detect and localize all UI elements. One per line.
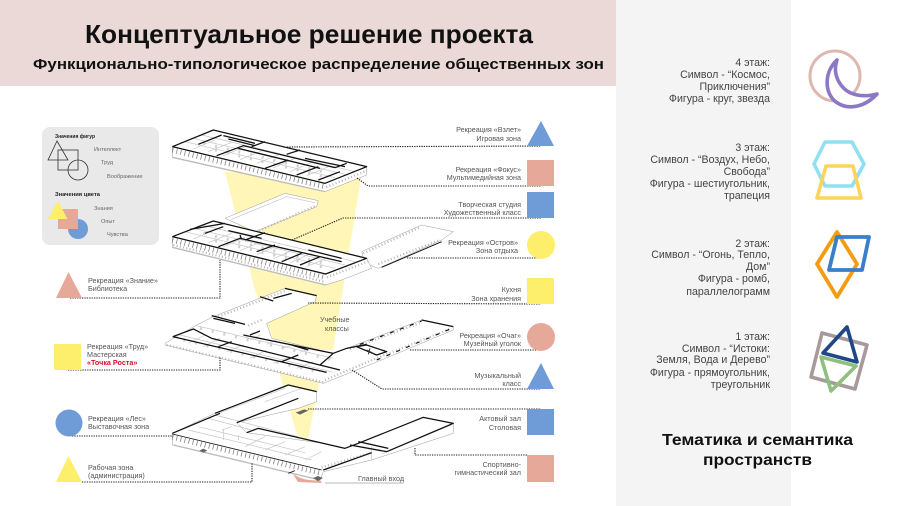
floor 3 wing right xyxy=(362,225,453,268)
legend figures xyxy=(48,141,88,180)
left item: Знание: Библиотека xyxy=(88,284,127,293)
label: Главный вход: Главный вход xyxy=(358,474,405,483)
text: floor 2 xyxy=(651,238,770,298)
icon: hexagon and trapezoid xyxy=(814,142,864,198)
panel: legend xyxy=(42,127,159,245)
right item: Спортивный зал: гимнастический зал xyxy=(455,468,521,477)
legend heading: colours: Значения цвета xyxy=(55,192,101,198)
right item: Очаг xyxy=(459,323,555,351)
label: Учебные классы: Учебные xyxy=(320,315,349,324)
left item: Знание xyxy=(56,272,158,298)
right item: Фокус: Рекреация «Фокус» xyxy=(456,165,521,174)
left item: Труд: Мастерская xyxy=(87,350,127,359)
left item: Труд xyxy=(54,342,148,370)
panel: side column xyxy=(616,0,791,506)
left item: Знание: Рекреация «Знание» xyxy=(88,276,158,285)
label: Главный вход xyxy=(325,474,405,483)
text: floor 3: Символ - “Воздух, Небо, xyxy=(650,154,770,166)
legend figure labels: Труд xyxy=(101,160,114,166)
text: floor 1: 1 этаж: xyxy=(735,331,770,343)
yellow projection beams xyxy=(225,172,362,440)
right item: Музыкальный класс xyxy=(474,363,554,389)
text: floor 2: Символ - “Огонь, Тепло, xyxy=(651,249,770,261)
right item: Творческая студия: Художественный класс xyxy=(444,208,521,217)
legend colour labels: Чувства xyxy=(107,232,129,238)
right item: Остров: Рекреация «Остров» xyxy=(448,238,518,247)
text: floor 2: параллелограмм xyxy=(686,286,770,298)
icon: rhombus and parallelogram xyxy=(817,232,869,297)
caption: themes and semantics xyxy=(662,432,853,469)
right item: Взлет: Рекреация «Взлет» xyxy=(456,125,521,134)
caption: themes and semantics: Тематика и семантика xyxy=(662,432,853,449)
floor 2 plan xyxy=(165,288,453,383)
right item: Кухня xyxy=(471,278,554,304)
text: floor 3: Фигура - шестиугольник, xyxy=(650,178,770,190)
right item: Актовый зал xyxy=(479,409,554,435)
caption: themes and semantics: пространств xyxy=(703,452,812,469)
right item: Взлет xyxy=(456,121,554,146)
legend figure labels: Интеллект xyxy=(94,147,122,153)
floor 1 plan xyxy=(172,385,453,480)
legend colour labels: Опыт xyxy=(101,219,115,225)
right item: Спортивный зал xyxy=(455,455,554,482)
text: floor 4: 4 этаж: xyxy=(735,57,770,69)
right item: Кухня: Зона хранения xyxy=(471,294,521,303)
text: floor 1: треугольник xyxy=(711,379,770,391)
right item: Остров xyxy=(448,231,555,259)
right item: Творческая студия: Творческая студия xyxy=(458,200,521,209)
legend colour labels: Знания xyxy=(94,206,113,212)
left item: Рабочая зона xyxy=(56,456,145,482)
right item: Фокус: Мультимедийная зона xyxy=(447,173,521,182)
right item: Взлет: Игровая зона xyxy=(476,134,521,143)
text: floor 4: Фигура - круг, звезда xyxy=(669,93,770,105)
legend colour labels xyxy=(94,206,129,238)
title: Концептуальное решение проекта xyxy=(85,19,534,49)
label: Учебные классы xyxy=(320,315,349,333)
label: Учебные классы: классы xyxy=(325,324,349,333)
text: floor 1: Фигура - прямоугольник, xyxy=(650,367,770,379)
left item: Рабочая зона: (администрация) xyxy=(88,471,145,480)
legend heading: figures: Значения фигур xyxy=(55,133,95,140)
floor 3 wing left xyxy=(225,193,318,233)
right item: Творческая студия xyxy=(444,192,554,218)
right item: Фокус xyxy=(447,160,554,186)
subtitle: Функционально-типологическое распределение общественных зон xyxy=(33,56,604,73)
right item: Актовый зал: Столовая xyxy=(489,423,521,432)
icon: square and triangles xyxy=(811,327,867,391)
text: floor 4: Приключения” xyxy=(699,81,770,93)
legend figure labels xyxy=(94,147,143,180)
panel: header band xyxy=(0,0,616,86)
left item: Труд: «Точка Роста» xyxy=(87,358,137,367)
left item: Лес xyxy=(56,410,149,436)
left item: Лес: Рекреация «Лес» xyxy=(88,414,146,423)
right item: Музыкальный класс: класс xyxy=(502,379,521,388)
right item: Спортивный зал: Спортивно- xyxy=(483,460,522,469)
text: floor 2: 2 этаж: xyxy=(735,238,770,250)
text: floor 1 xyxy=(650,331,770,391)
legend figure labels: Воображение xyxy=(107,174,143,180)
right item: Кухня: Кухня xyxy=(502,285,521,294)
left item: Лес: Выставочная зона xyxy=(88,422,149,431)
text: floor 2: Дом” xyxy=(746,261,770,273)
text: floor 4: Символ - “Космос, xyxy=(680,69,770,81)
text: floor 4 xyxy=(669,57,770,105)
text: floor 3: Свобода” xyxy=(724,166,770,178)
text: floor 1: Символ - “Истоки: xyxy=(682,343,770,355)
text: floor 3 xyxy=(650,142,770,202)
legend colours xyxy=(48,201,88,239)
text: floor 1: Земля, Вода и Дерево” xyxy=(656,354,770,366)
left item: Рабочая зона: Рабочая зона xyxy=(88,463,133,472)
icon: circle and crescent xyxy=(810,51,877,107)
right item: Очаг: Рекреация «Очаг» xyxy=(459,331,521,340)
text: floor 3: 3 этаж: xyxy=(735,142,770,154)
text: floor 3: трапеция xyxy=(724,190,770,202)
floor 3 plan xyxy=(172,221,372,285)
left item: Труд: Рекреация «Труд» xyxy=(87,342,148,351)
right item: Музыкальный класс: Музыкальный xyxy=(474,371,521,380)
right item: Очаг: Музейный уголок xyxy=(464,339,522,348)
floor 4 plan xyxy=(172,130,367,192)
dotted leader lines xyxy=(68,146,541,482)
main entrance marker xyxy=(293,474,323,483)
right item: Остров: Зона отдыха xyxy=(476,246,518,255)
right item: Актовый зал: Актовый зал xyxy=(479,414,521,423)
text: floor 2: Фигура - ромб, xyxy=(698,273,770,285)
